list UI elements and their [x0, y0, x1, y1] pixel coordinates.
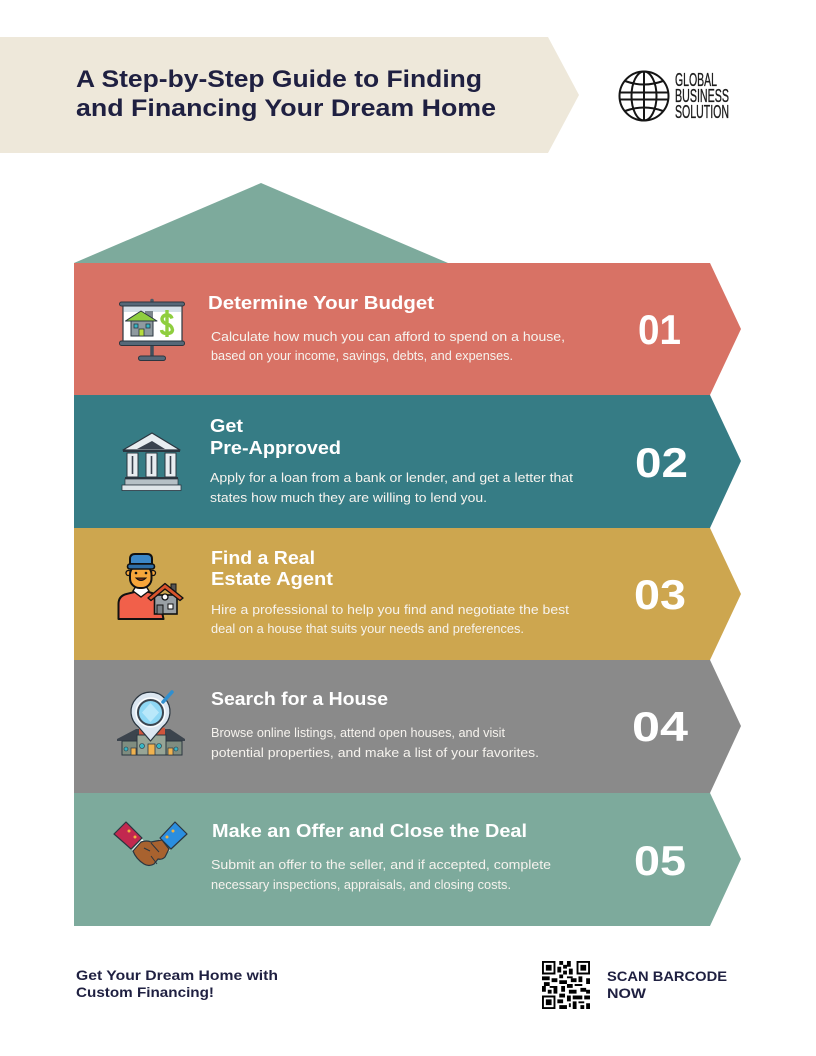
- step description: Calculate how much you can afford to spend on a house,: [211, 329, 565, 344]
- panel: step 5: [74, 793, 741, 926]
- step heading: Determine Your Budget: [208, 292, 434, 313]
- step description: [211, 857, 551, 892]
- step heading: Find a Real: [211, 547, 315, 568]
- step description: potential properties, and make a list of your favorites.: [211, 745, 539, 760]
- logo wordmark: SOLUTION: [675, 102, 729, 122]
- step description: Browse online listings, attend open houses, and visit: [211, 725, 505, 740]
- icon: bank: [122, 433, 181, 490]
- step description: Hire a professional to help you find and negotiate the best: [211, 602, 569, 617]
- step heading: Make an Offer and Close the Deal: [212, 820, 527, 841]
- step description: based on your income, savings, debts, and expenses.: [211, 348, 513, 363]
- logo wordmark: GLOBAL: [675, 70, 717, 90]
- roof: [74, 183, 448, 263]
- step description: deal on a house that suits your needs and preferences.: [211, 621, 524, 636]
- step number: 04: [632, 703, 689, 750]
- logo wordmark: [675, 70, 729, 122]
- title: [76, 66, 496, 122]
- icon: real estate agent with house: [118, 554, 183, 619]
- step description: Submit an offer to the seller, and if accepted, complete: [211, 857, 551, 872]
- panel: step 1: [74, 263, 741, 395]
- step description: [211, 602, 569, 636]
- step heading: Pre-Approved: [210, 437, 341, 458]
- step number: 03: [634, 571, 686, 618]
- title: A Step-by-Step Guide to Finding: [76, 66, 482, 93]
- title: and Financing Your Dream Home: [76, 95, 496, 122]
- step heading: Estate Agent: [211, 568, 333, 589]
- footer tagline: Get Your Dream Home with: [76, 967, 278, 983]
- step description: necessary inspections, appraisals, and closing costs.: [211, 877, 511, 892]
- logo wordmark: BUSINESS: [675, 86, 729, 106]
- step number: 05: [634, 837, 686, 884]
- step description: [211, 725, 539, 760]
- barcode call to action: NOW: [607, 985, 647, 1001]
- step description: [211, 329, 565, 363]
- step number: 02: [635, 439, 688, 486]
- footer tagline: [76, 967, 278, 1000]
- step number: 01: [638, 306, 681, 353]
- step description: states how much they are willing to lend you.: [210, 490, 487, 505]
- barcode call to action: [607, 968, 727, 1001]
- logo: [620, 70, 729, 122]
- barcode call to action: SCAN BARCODE: [607, 968, 727, 984]
- icon: map pin magnifier over houses: [117, 692, 185, 755]
- panel: step 2: [74, 395, 741, 528]
- icon: globe: [620, 72, 668, 120]
- QR code: [542, 961, 590, 1009]
- step description: [210, 470, 573, 505]
- header banner: [0, 37, 579, 153]
- footer tagline: Custom Financing!: [76, 984, 214, 1000]
- step heading: [210, 415, 341, 458]
- panel: step 3: [74, 528, 741, 660]
- icon: handshake: [114, 822, 187, 866]
- icon: presentation board with house and dollar: [120, 299, 184, 360]
- step heading: Search for a House: [211, 688, 388, 709]
- step heading: Get: [210, 415, 243, 436]
- panel: step 4: [74, 660, 741, 793]
- step heading: [211, 547, 333, 589]
- step description: Apply for a loan from a bank or lender, and get a letter that: [210, 470, 573, 485]
